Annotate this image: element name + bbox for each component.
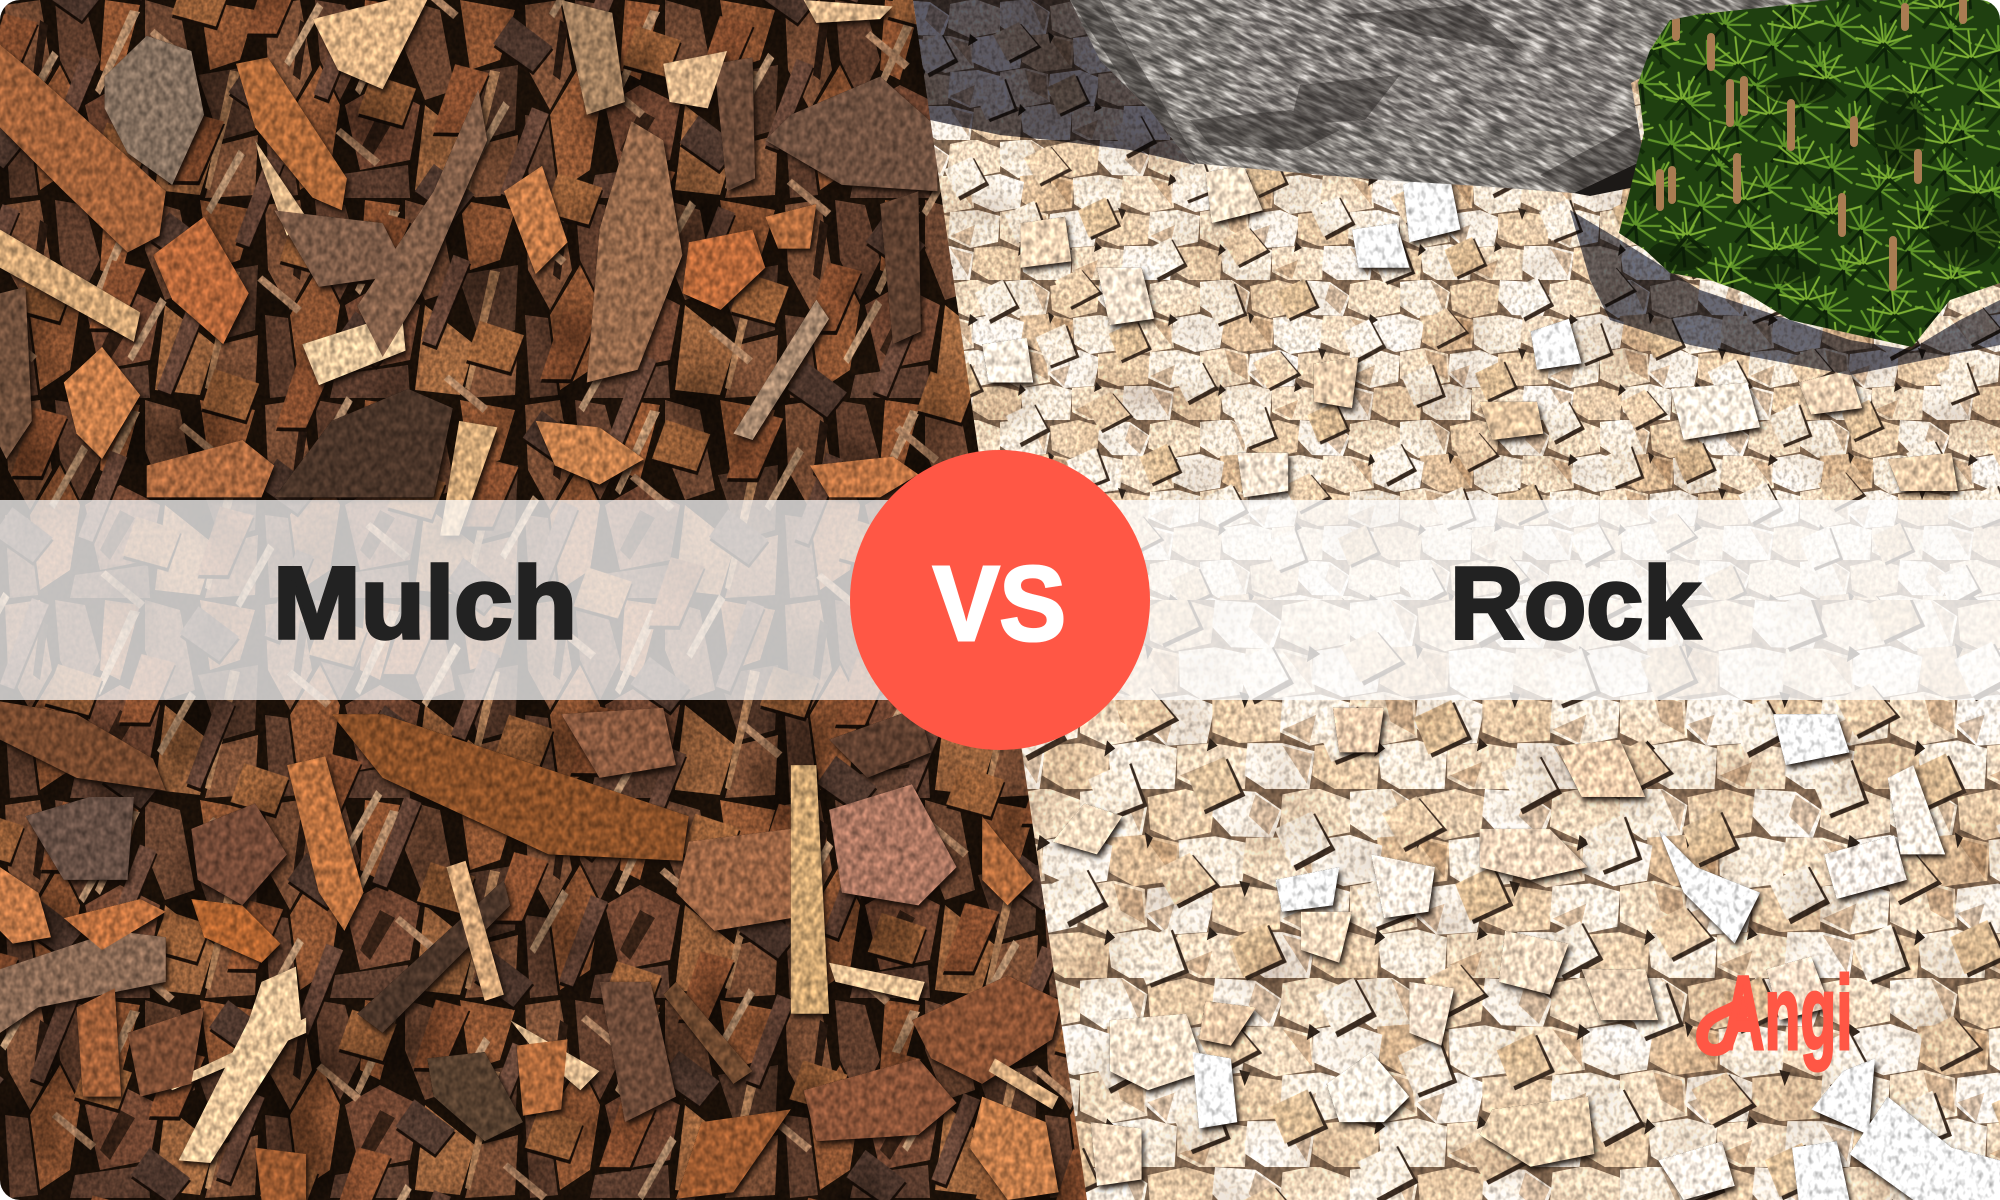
shadow under pine [1570,210,2000,375]
mulch chips lower field [0,600,1100,1200]
logo: Angi [1702,955,1853,1072]
translucent label band: rock side [1000,500,2000,700]
gravel field upper [900,0,2000,610]
hand-placed pale stones [982,166,2000,1200]
boulder [1070,0,1828,193]
boulder dark patches [1070,0,1644,193]
heading: Mulch: Mulch [273,546,577,660]
gravel tone variation [900,0,2000,1200]
translucent label band: mulch side [0,500,1000,700]
bark and wood chips [0,0,1061,1200]
VS label: VS [933,545,1066,663]
mulch tone variation [0,0,1100,1200]
mulch chips upper field [0,0,978,600]
panel: mulch photograph [0,0,1100,1200]
boulder contact shadow [1574,160,1660,196]
heading: Rock: Rock [1450,546,1700,660]
gravel field lower, larger stones [999,600,2000,1200]
VS badge [850,450,1150,750]
logo swirl [1702,1002,1744,1050]
pine shrub [1600,0,2000,360]
pine shadow pockets [1648,76,2000,284]
panel: rock photograph [913,0,2000,1200]
shaded grey gravel behind boulder [913,0,1195,165]
logo wordmark: Angi [1722,955,1853,1072]
pine candles [1660,0,1963,287]
